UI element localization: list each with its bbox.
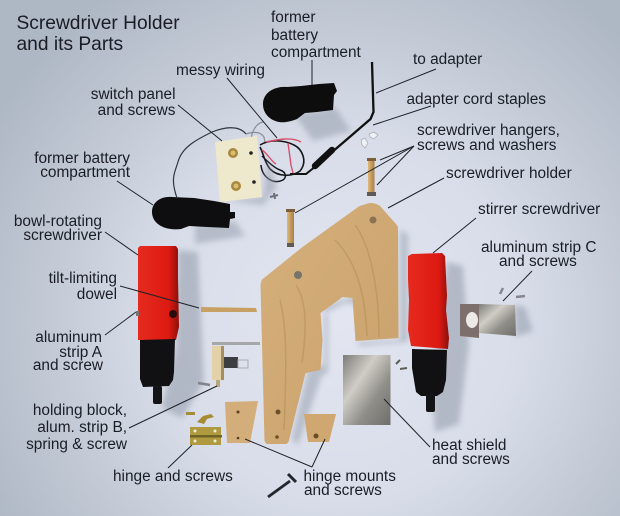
label: former battery compartment (top): battery <box>271 27 318 44</box>
part: adapter cord staples <box>361 132 378 148</box>
part: aluminum strip C and screws <box>460 288 533 338</box>
label: aluminum strip C: and screws <box>499 253 577 270</box>
part: holding block, strip B, spring and screw <box>198 342 260 387</box>
part: small hinge mount <box>304 414 336 442</box>
part: stirrer screwdriver <box>408 253 469 432</box>
label: former battery compartment (left): compartment <box>40 164 131 181</box>
label: bowl-rotating screwdriver: screwdriver <box>23 227 102 244</box>
label: screwdriver hangers: screwdriver hangers, <box>417 122 560 139</box>
title: and its Parts <box>16 34 123 55</box>
label: former battery compartment (top): compartment <box>271 44 362 61</box>
part: heat shield and screws <box>343 355 407 425</box>
part: adapter cord <box>290 62 374 174</box>
label: stirrer screwdriver: stirrer screwdriver <box>478 201 600 218</box>
label: aluminum strip A <box>33 329 104 374</box>
label: aluminum strip A: strip A <box>59 344 103 361</box>
label: holding block: spring & screw <box>26 436 128 453</box>
label: hinge mounts and screws: and screws <box>304 482 382 499</box>
label: heat shield and screws: heat shield <box>432 437 506 454</box>
part: screwdriver hanger lower dowel <box>286 209 295 247</box>
part: switch panel and screws <box>215 136 278 205</box>
label: aluminum strip C: aluminum strip C <box>481 239 596 256</box>
label: adapter cord staples: adapter cord staples <box>406 91 546 108</box>
label: former battery compartment (left) <box>34 150 131 181</box>
leader lines <box>105 60 532 468</box>
label: to adapter: to adapter <box>413 51 482 68</box>
label: aluminum strip A: aluminum <box>35 329 102 346</box>
part: upper former battery compartment <box>263 83 351 141</box>
label: aluminum strip A: and screw <box>33 357 104 374</box>
part: hinge and screws <box>186 412 222 445</box>
label: hinge and screws: hinge and screws <box>113 468 233 485</box>
label: screwdriver holder: screwdriver holder <box>446 165 572 182</box>
label: former battery compartment (top): former <box>271 9 315 26</box>
label: switch panel and screws <box>91 86 176 119</box>
label: screwdriver hangers: screws and washers <box>417 137 557 154</box>
part: bowl-rotating screwdriver <box>136 246 204 418</box>
label: hinge mounts and screws <box>304 468 396 499</box>
part: screwdriver hanger upper dowel <box>367 158 376 196</box>
part: screwdriver holder board <box>260 203 408 445</box>
label: bowl-rotating screwdriver <box>14 213 102 244</box>
part: large hinge mount <box>225 401 258 443</box>
label: switch panel and screws: and screws <box>98 102 176 119</box>
label: former battery compartment (top) <box>271 9 362 61</box>
label: tilt-limiting dowel <box>49 270 117 303</box>
label: switch panel and screws: switch panel <box>91 86 176 103</box>
label: tilt-limiting dowel: dowel <box>77 286 117 303</box>
title: Screwdriver Holder <box>16 13 180 34</box>
label: holding block: alum. strip B, <box>37 419 127 436</box>
label: holding block <box>26 402 128 453</box>
label: bowl-rotating screwdriver: bowl-rotating <box>14 213 102 230</box>
label: screwdriver hangers <box>417 122 560 154</box>
part: lower former battery compartment <box>152 197 245 244</box>
label: hinge mounts and screws: hinge mounts <box>304 468 396 485</box>
part: loose screw <box>268 474 296 497</box>
title <box>16 13 180 55</box>
label: messy wiring: messy wiring <box>176 62 265 79</box>
label: tilt-limiting dowel: tilt-limiting <box>49 270 117 287</box>
label: heat shield and screws: and screws <box>432 451 510 468</box>
label: aluminum strip C <box>481 239 596 270</box>
part: tilt-limiting dowel <box>201 307 257 312</box>
label: heat shield and screws <box>432 437 510 468</box>
label: former battery compartment (left): former battery <box>34 150 130 167</box>
part: messy wiring <box>173 122 304 198</box>
label: holding block: holding block, <box>33 402 127 419</box>
